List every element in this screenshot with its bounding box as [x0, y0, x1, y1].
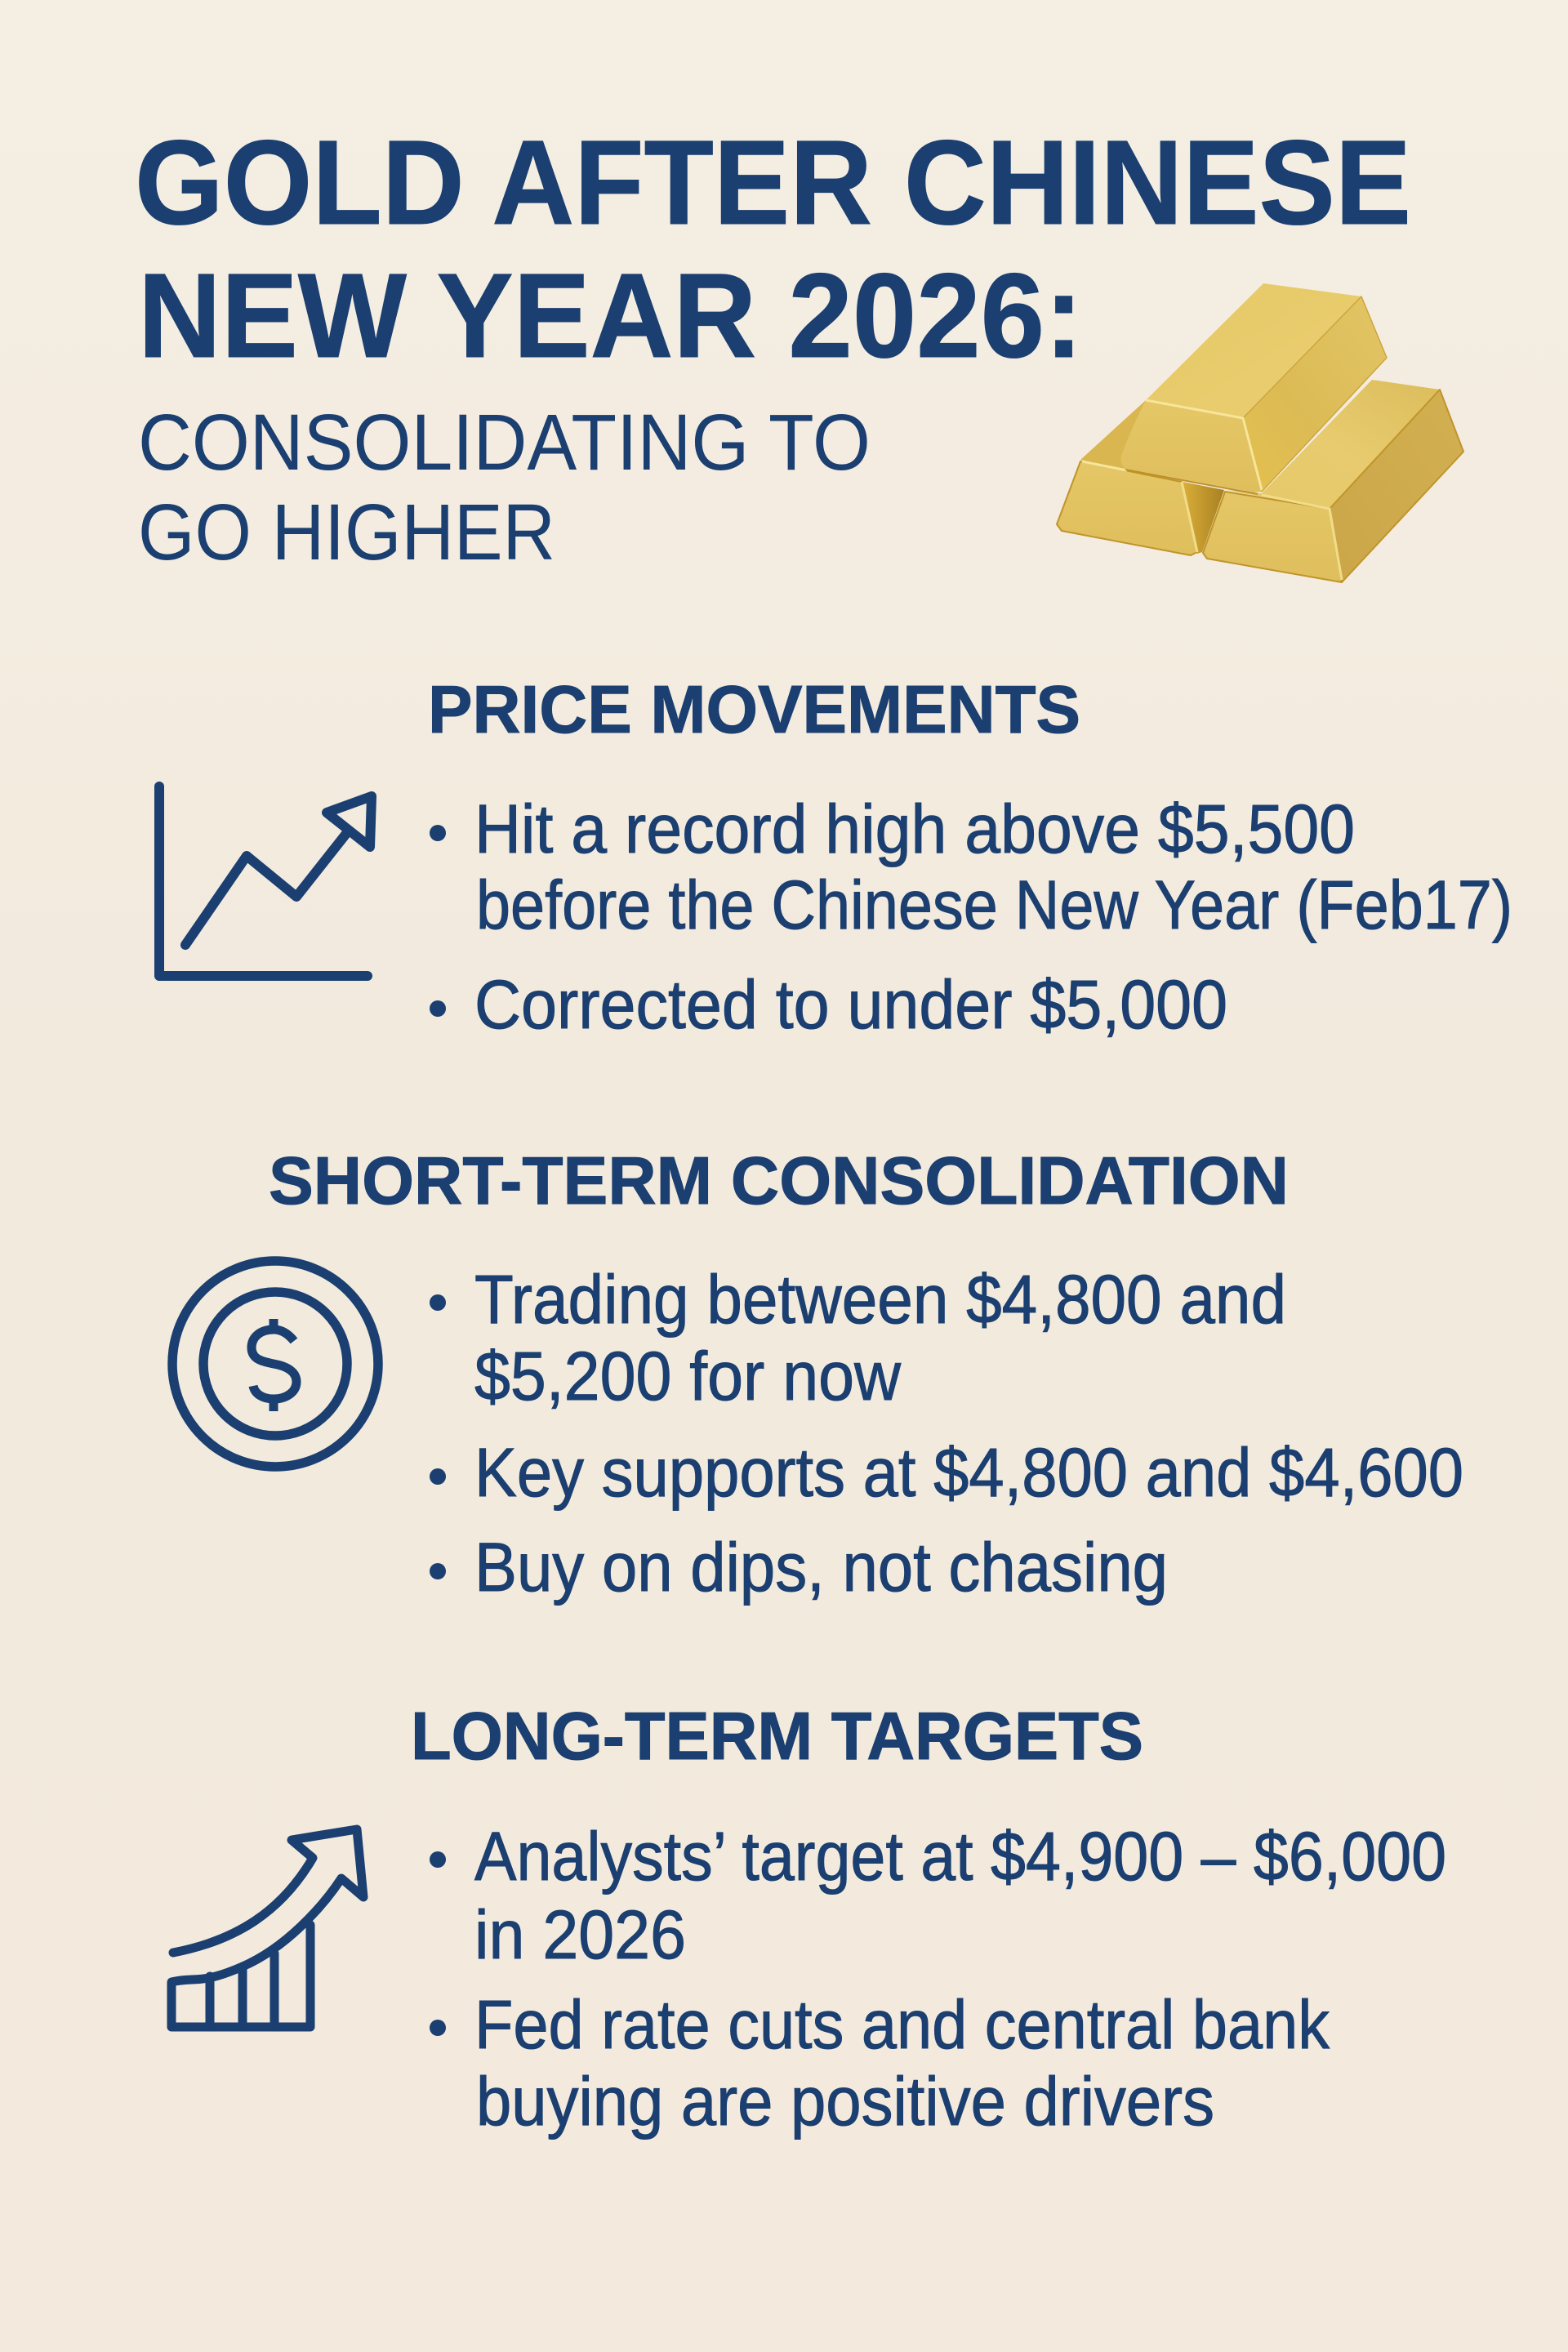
bullets: short-term consolidation: Trading between $4,800 and: [474, 1261, 1286, 1338]
subtitle: [138, 398, 871, 577]
title: GOLD AFTER CHINESE: [135, 116, 1411, 250]
bullets: short-term consolidation: Key supports at $4,800 and $4,600: [474, 1434, 1463, 1511]
bullets: short-term consolidation: [430, 1261, 1463, 1606]
title: [135, 116, 1411, 383]
bullets: price movements: [430, 791, 1512, 1043]
icon: stacked gold bars: [1057, 283, 1463, 582]
heading: short-term consolidation: SHORT-TERM CONSOLIDATION: [269, 1143, 1289, 1218]
bullets: long-term targets: buying are positive drivers: [476, 2063, 1214, 2140]
panel: price movements: [159, 671, 1512, 1043]
icon: line chart with arrow: [159, 786, 372, 976]
title: NEW YEAR 2026:: [138, 249, 1083, 383]
icon: dollar coin: [172, 1261, 378, 1467]
panel: short-term consolidation: [172, 1143, 1463, 1606]
bullets: price movements: Corrected to under $5,000: [474, 966, 1227, 1043]
heading: long-term targets: LONG-TERM TARGETS: [411, 1698, 1143, 1774]
bullets: short-term consolidation: Buy on dips, not chasing: [474, 1529, 1168, 1606]
bullets: price movements: Hit a record high above $5,500: [474, 791, 1355, 867]
subtitle: CONSOLIDATING TO: [138, 398, 871, 487]
bullets: long-term targets: Analysts’ target at $4,900 – $6,000: [474, 1818, 1446, 1895]
icon: rising arrow over bars: [172, 1829, 363, 2027]
bullets: long-term targets: [430, 1818, 1446, 2140]
panel: long-term targets: [172, 1698, 1446, 2140]
bullets: short-term consolidation: $5,200 for now: [474, 1338, 901, 1414]
subtitle: GO HIGHER: [138, 488, 555, 577]
heading: price movements: PRICE MOVEMENTS: [428, 671, 1080, 747]
bullets: long-term targets: Fed rate cuts and central bank: [474, 1986, 1330, 2063]
bullets: long-term targets: in 2026: [474, 1896, 686, 1973]
